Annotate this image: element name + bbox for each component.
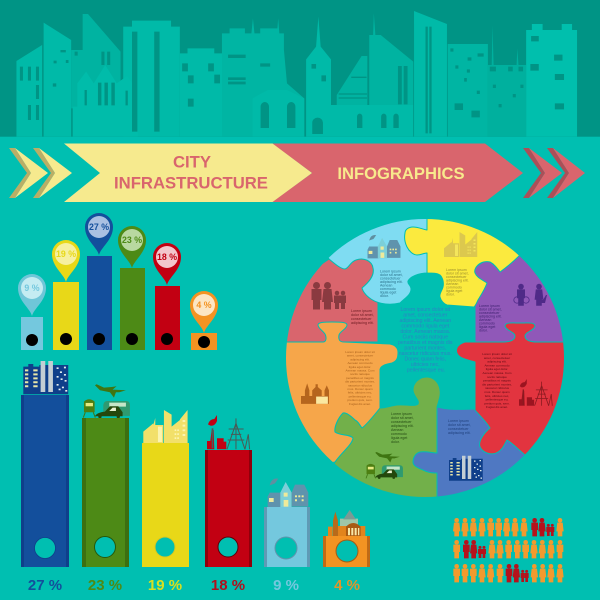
- text: orange piece: Fugiat dis amet.: [349, 402, 371, 406]
- text: light blue piece: Lorem ipsum: [380, 270, 401, 274]
- text: red piece: dis parturient montes,: [482, 382, 512, 386]
- bar: 18 percent with power plant: [205, 415, 252, 594]
- centre text: nascetur ridiculus mus.: [399, 351, 452, 357]
- text: orange piece: pretium quis, sem.: [347, 398, 373, 402]
- bar: 18 percent with power plant: 18 %: [211, 577, 245, 594]
- bar and pin: 23 percent: [118, 226, 146, 350]
- text: light blue piece: ligula eget: [380, 290, 396, 294]
- text: purple piece: dolor sit amet,: [479, 308, 502, 312]
- bar and pin: 19 percent: 19 %: [56, 249, 76, 259]
- text: purple piece: consectetuer: [479, 311, 500, 315]
- bar and pin: 18 percent: 18 %: [157, 252, 177, 262]
- city skyline silhouette: [16, 11, 577, 137]
- text: pink piece: dolor sit amet,: [351, 313, 374, 317]
- text: green piece: commodo: [391, 432, 407, 436]
- text: light blue piece: Aenean: [380, 284, 392, 288]
- text: green piece: Lorem ipsum: [391, 412, 412, 416]
- text: purple piece: ligula eget: [479, 325, 495, 329]
- icon: buildings: [449, 456, 483, 481]
- row 1 of people: [453, 518, 564, 536]
- small bar chart with map pins: [18, 213, 218, 350]
- bar and pin: 9 percent: [18, 274, 46, 350]
- people pictogram grid: [453, 518, 564, 582]
- piece: pink: [287, 260, 378, 342]
- piece: red: [457, 322, 564, 455]
- piece: light blue: [328, 219, 426, 304]
- text: yellow piece: dolor.: [446, 292, 455, 296]
- text: green piece: dolor.: [391, 440, 400, 444]
- text: purple piece: Lorem ipsum: [479, 304, 500, 308]
- text: red piece: Lorem ipsum dolor sit: [482, 352, 512, 356]
- text: orange piece: pellentesque eu,: [349, 394, 371, 398]
- piece: yellow: [404, 219, 520, 306]
- piece: orange: [286, 322, 398, 462]
- text: blue piece: dolor sit amet,: [448, 423, 471, 427]
- text: red piece: sociis natoque: [487, 375, 507, 379]
- text: red piece: felis, ultricies nec,: [485, 394, 509, 398]
- text: orange piece: nascetur ridiculus: [348, 383, 372, 387]
- bar: 19 percent with city: [142, 410, 189, 594]
- row 2 of people: [453, 540, 563, 558]
- icon: power plant: [519, 379, 552, 406]
- text: purple piece: Aenean: [479, 318, 491, 322]
- puzzle wheel: [286, 219, 564, 497]
- text: green piece: dolor sit amet,: [391, 416, 414, 420]
- text: pink piece: Lorem ipsum: [351, 309, 372, 313]
- banner arrow: city infrastructure: [64, 144, 312, 202]
- bar and pin: 19 percent: [52, 240, 80, 350]
- bar: 4 percent with church: 4 %: [334, 577, 360, 594]
- text: orange piece: mus. Donec quam: [347, 387, 373, 391]
- large bar chart: [21, 361, 370, 594]
- text: orange piece: felis, ultricies nec,: [348, 391, 372, 395]
- text: orange piece: Aenean commodo: [347, 361, 373, 365]
- icon: transport: [366, 452, 403, 479]
- text: green piece: ligula eget: [391, 436, 407, 440]
- text: pink piece: adipiscing elit.: [351, 321, 374, 325]
- text: red piece: penatibus et magnis: [483, 379, 511, 383]
- text: orange piece: ligula eget dolor.: [349, 365, 371, 369]
- text: orange piece: Lorem ipsum dolor sit: [345, 350, 375, 354]
- text: yellow piece: ligula eget: [446, 289, 462, 293]
- centre text: Cum sociis natoque: [402, 334, 448, 340]
- centre text: pellentesque eu.: [407, 368, 445, 374]
- text: light blue piece: dolor sit amet,: [380, 273, 403, 277]
- bar and pin: 4 percent: 4 %: [196, 300, 212, 310]
- text: light blue piece: adipiscing elit.: [380, 280, 403, 284]
- text: orange piece: penatibus et magnis: [346, 376, 374, 380]
- bar: 9 percent with houses: 9 %: [273, 577, 299, 594]
- bar: 27 percent with buildings: 27 %: [28, 577, 62, 594]
- centre text: Lorem ipsum dolor sit: [400, 307, 451, 313]
- text: orange piece: amet, consectetuer: [347, 354, 373, 358]
- centre text: amet, consectetuer: [403, 312, 448, 318]
- bar: 19 percent with city: 19 %: [148, 577, 182, 594]
- bar: 4 percent with church: [323, 510, 370, 594]
- bar and pin: 27 percent: 27 %: [89, 222, 109, 232]
- bar and pin: 4 percent: [190, 291, 218, 350]
- text: red piece: amet, consectetuer: [484, 356, 510, 360]
- text: red piece: Aenean commodo: [484, 363, 510, 367]
- heading: city infrastructure: INFRASTRUCTURE: [114, 173, 268, 192]
- text: blue piece: Lorem ipsum: [448, 419, 469, 423]
- bar: 23 percent with transport: 23 %: [88, 577, 122, 594]
- text: red piece: Aenean massa. Cum: [483, 371, 512, 375]
- centre text: adipiscing elit. Aenean: [399, 318, 451, 324]
- text: red piece: adipiscing elit.: [487, 360, 507, 364]
- text: green piece: consectetuer: [391, 420, 412, 424]
- text: pink piece: consectetuer: [351, 317, 372, 321]
- text: red piece: pretium quis, sem.: [484, 401, 510, 405]
- text: red piece: nascetur ridiculus: [485, 386, 509, 390]
- text: red piece: mus. Donec quam: [484, 390, 510, 394]
- bar and pin: 18 percent: [153, 243, 181, 350]
- text: orange piece: dis parturient montes,: [345, 380, 375, 384]
- text: red piece: ligula eget dolor.: [486, 367, 508, 371]
- text: orange piece: sociis natoque: [350, 372, 370, 376]
- icon: cyclist, person and pram: [514, 284, 547, 306]
- text: light blue piece: consectetuer: [380, 276, 401, 280]
- icon: church: [301, 383, 329, 404]
- text: purple piece: commodo: [479, 322, 495, 326]
- icon: city skyline: [444, 232, 477, 257]
- centre text: penatibus et magnis dis: [398, 340, 453, 346]
- text: yellow piece: commodo: [446, 286, 462, 290]
- icon: houses: [368, 235, 400, 258]
- row 3 of people: [453, 564, 564, 582]
- centre text: dolor. Aenean massa.: [400, 329, 450, 335]
- text: red piece: pellentesque eu,: [486, 398, 508, 402]
- icon: family: [312, 282, 346, 310]
- piece: purple: [475, 252, 564, 343]
- text: purple piece: adipiscing elit.: [479, 314, 502, 318]
- left chevrons: [9, 148, 72, 198]
- centre text: ultricies nec,: [411, 362, 440, 368]
- right chevrons: [523, 148, 585, 198]
- text: blue piece: adipiscing elit.: [448, 431, 471, 435]
- piece: blue: [412, 406, 532, 496]
- bar and pin: 27 percent: [85, 213, 113, 350]
- text: light blue piece: commodo: [380, 287, 396, 291]
- text: purple piece: dolor.: [479, 328, 488, 332]
- bar: 27 percent with buildings: [21, 361, 69, 594]
- piece: green: [334, 378, 440, 497]
- centre text: commodo ligula eget: [401, 324, 450, 330]
- text: blue piece: consectetuer: [448, 427, 469, 431]
- heading: city infrastructure: CITY: [173, 153, 211, 172]
- text: yellow piece: adipiscing elit.: [446, 278, 469, 282]
- bar: 9 percent with houses: [264, 478, 310, 594]
- text: yellow piece: dolor sit amet,: [446, 272, 469, 276]
- text: green piece: Aenean: [391, 428, 403, 432]
- text: yellow piece: Aenean: [446, 282, 458, 286]
- text: yellow piece: consectetuer: [446, 275, 467, 279]
- puzzle pieces: [286, 219, 564, 497]
- bar and pin: 9 percent: 9 %: [24, 283, 40, 293]
- heading: infographics: INFOGRAPHICS: [337, 164, 465, 183]
- bar: 23 percent with transport: [82, 384, 130, 594]
- text: light blue piece: dolor.: [380, 294, 389, 298]
- centre text: parturient montes,: [404, 346, 446, 352]
- text: yellow piece: Lorem ipsum: [446, 268, 467, 272]
- centre text: Donec quam felis,: [405, 356, 446, 362]
- text: red piece: Fugiat dis amet.: [486, 405, 508, 409]
- bar and pin: 23 percent: 23 %: [122, 235, 142, 245]
- banner arrow: infographics: [272, 144, 523, 202]
- text: green piece: adipiscing elit.: [391, 424, 414, 428]
- text: orange piece: Aenean massa. Cum: [346, 368, 375, 372]
- skyline band: [0, 0, 600, 137]
- text: orange piece: adipiscing elit.: [350, 357, 370, 361]
